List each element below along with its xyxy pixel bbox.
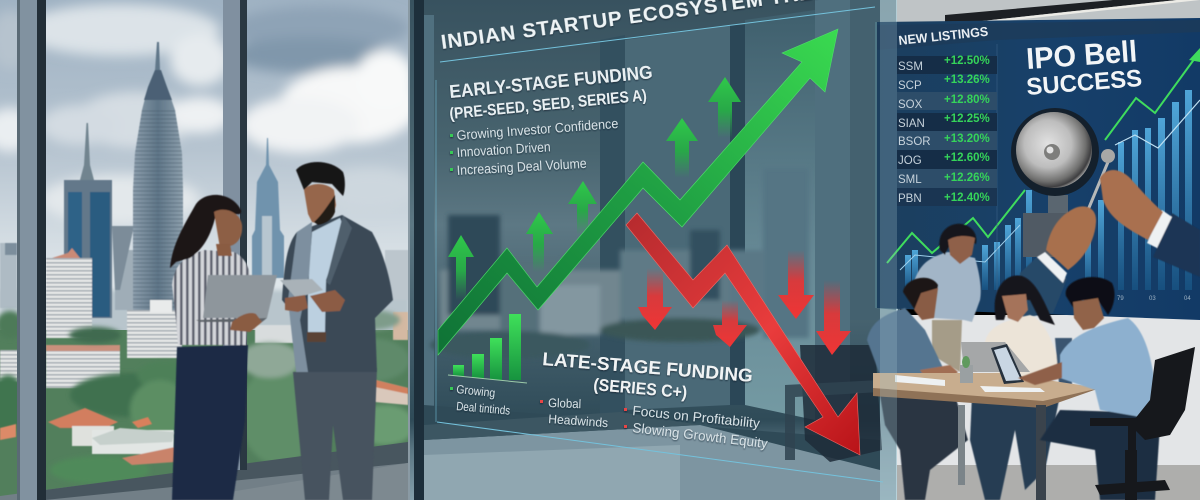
figure: seated woman centre xyxy=(970,275,1072,500)
text block: new listings table: SOX xyxy=(898,99,923,111)
figure: woman with laptop xyxy=(170,195,277,500)
text block: late-stage funding: Focus on Profitability xyxy=(632,403,761,431)
hands pulling the bell xyxy=(1020,170,1200,318)
rising green trend arrow xyxy=(438,29,838,355)
text block: early-stage funding: EARLY-STAGE FUNDING xyxy=(448,61,653,102)
text block: new listings table: +12.50% xyxy=(944,55,990,67)
text block: new listings table: +12.80% xyxy=(944,94,990,106)
trees and rooftops xyxy=(0,310,415,484)
text block: growing deal trends: Deal tintinds xyxy=(456,399,511,418)
glass panel overlay on seated man xyxy=(880,0,897,500)
text block: early-stage funding: Innovation Driven xyxy=(456,139,551,160)
panel: glass trend board xyxy=(410,0,900,500)
figure: seated man left xyxy=(867,278,968,500)
text block: new listings table: SCP xyxy=(898,80,922,92)
text block: late-stage funding: Global xyxy=(548,396,581,411)
text block: new listings table: SML xyxy=(898,174,922,186)
text block: early-stage funding: Growing Investor Confidence xyxy=(456,116,619,143)
window frames xyxy=(17,0,414,500)
text block: new listings table: +12.40% xyxy=(944,192,990,204)
panel: IPO screen xyxy=(877,18,1200,320)
laptop xyxy=(203,275,277,318)
reflected city xyxy=(430,168,809,359)
panel edge lines xyxy=(440,7,875,62)
office chair xyxy=(1090,347,1195,500)
far city haze xyxy=(0,288,408,330)
text block: late-stage funding: Headwinds xyxy=(548,412,609,430)
panel: window view with skyline xyxy=(0,0,420,500)
text block: growing deal trends: Growing xyxy=(456,382,496,400)
x axis labels: 79 xyxy=(1117,296,1124,302)
text block: new listings table: +12.26% xyxy=(944,172,990,184)
office chair behind glass xyxy=(800,345,882,462)
stock chart bars xyxy=(905,90,1192,290)
text block: new listings table: +13.26% xyxy=(944,74,990,86)
green small up arrows xyxy=(448,77,741,300)
x axis labels: 03 xyxy=(1149,296,1156,302)
text block: new listings table: +13.20% xyxy=(944,133,990,145)
text block: late-stage funding xyxy=(540,348,769,451)
heading: IPO Bell Success xyxy=(1025,35,1143,101)
conference table xyxy=(873,342,1100,500)
figure: standing woman xyxy=(913,224,981,372)
text block: new listings table xyxy=(897,24,997,206)
x axis labels: 04 xyxy=(1184,296,1191,302)
red small down arrows xyxy=(638,250,851,355)
text block: late-stage funding: (SERIES C+) xyxy=(593,375,688,402)
text block: early-stage funding: (PRE-SEED, SEED, SERIES A) xyxy=(449,87,647,123)
panel: back wall xyxy=(897,0,1200,500)
text block: new listings table: +12.25% xyxy=(944,113,990,125)
text block: growing deal trends xyxy=(450,382,511,418)
tablet xyxy=(280,279,323,298)
heading: IPO Bell Success: IPO Bell xyxy=(1025,35,1138,76)
laptops and plant xyxy=(961,342,1030,372)
falling red trend arrow xyxy=(626,213,860,455)
figure: man with tablet xyxy=(280,162,393,500)
floor reflection xyxy=(424,405,880,470)
figure: seated man right xyxy=(1018,277,1160,500)
text block: new listings table: +12.60% xyxy=(944,152,990,164)
text block: late-stage funding: LATE-STAGE FUNDING xyxy=(542,348,754,386)
text block: new listings table: JOG xyxy=(898,155,922,167)
text block: early-stage funding: Increasing Deal Volume xyxy=(456,156,587,178)
text block: new listings table: PBN xyxy=(898,193,922,205)
text block: new listings table: SIAN xyxy=(898,118,925,130)
floor and window sill xyxy=(0,442,408,500)
mini green bar chart xyxy=(448,314,527,383)
green trend line xyxy=(887,190,1025,263)
text block: late-stage funding: Slowing Growth Equity xyxy=(632,420,769,451)
heading: IPO Bell Success: SUCCESS xyxy=(1025,65,1143,101)
green tree base xyxy=(0,330,410,500)
icon: IPO bell xyxy=(1011,108,1115,257)
text block: new listings table: NEW LISTINGS xyxy=(898,24,989,48)
x axis labels xyxy=(1117,296,1191,302)
skyline buildings xyxy=(0,42,409,388)
text block: early-stage funding xyxy=(448,61,653,178)
text block: new listings table: SSM xyxy=(898,61,923,73)
text block: new listings table: BSOR xyxy=(898,136,931,148)
